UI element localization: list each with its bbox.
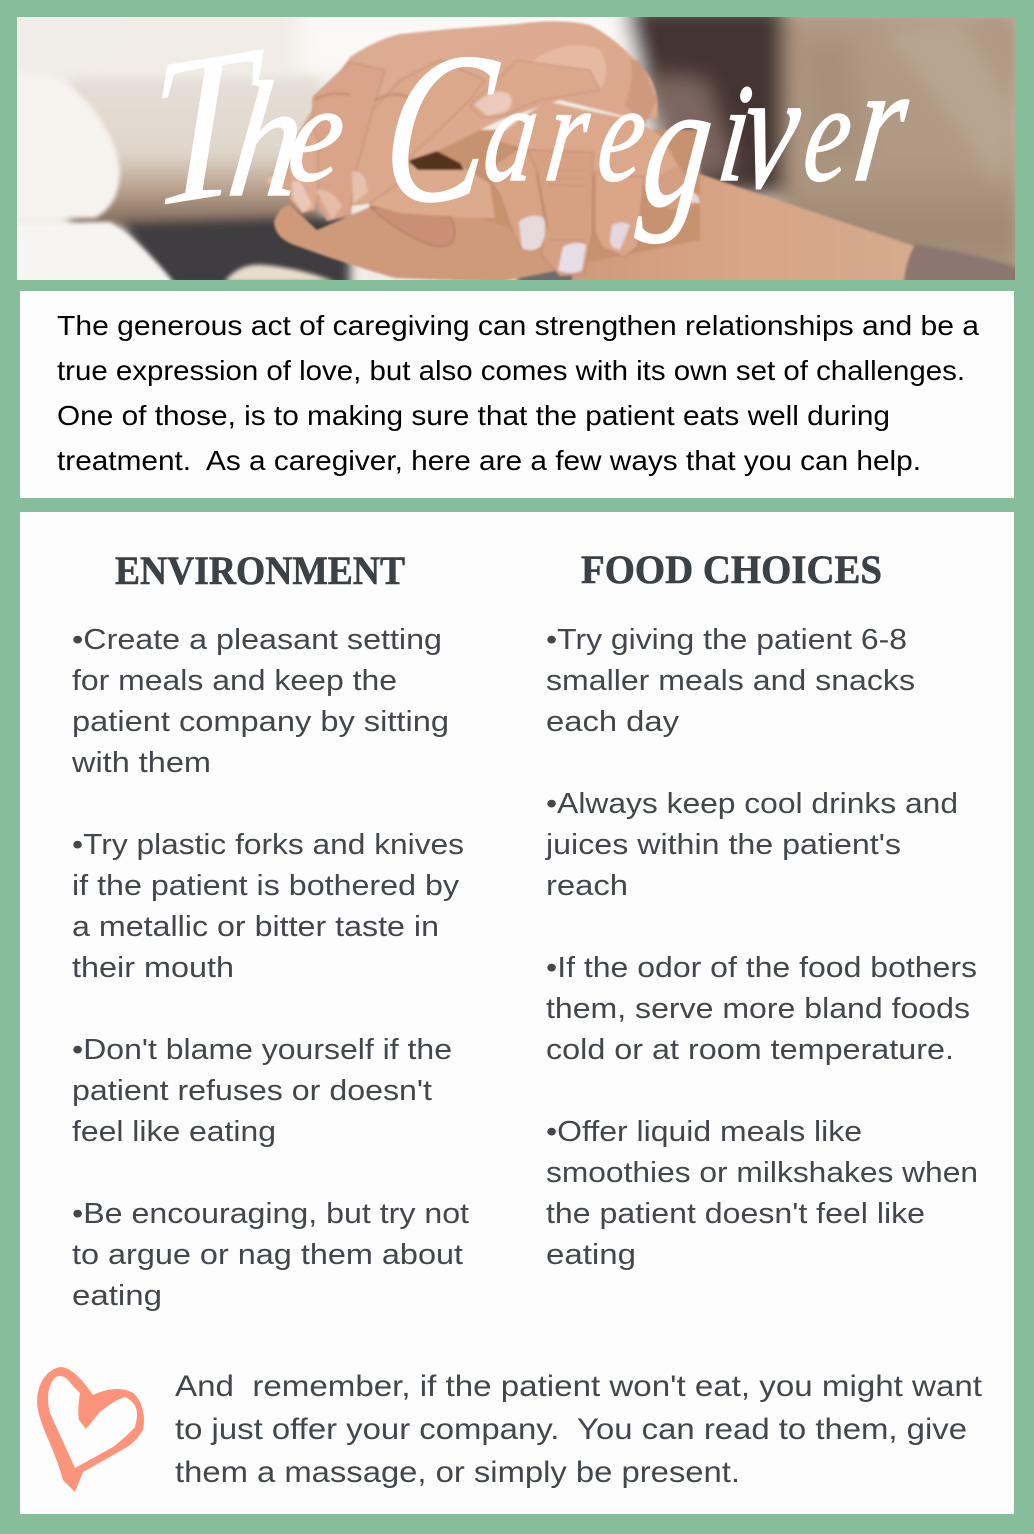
- old hand nails: [519, 216, 545, 250]
- lower inner finger: [370, 207, 455, 246]
- tip: pleasant setting: [71, 624, 449, 779]
- thumb nail: [474, 92, 512, 116]
- old hand finger D: [658, 167, 692, 208]
- column: environment: [71, 548, 469, 1312]
- tip: don't blame yourself: •Don't blame yourself if the: [72, 1034, 452, 1066]
- title: C: [372, 8, 508, 247]
- title: [120, 0, 922, 254]
- old hand wrinkles: [550, 170, 585, 240]
- tip: cool drinks: •Always keep cool drinks and: [546, 788, 958, 820]
- finger two: [310, 62, 385, 221]
- tip: food odor: cold or at room temperature.: [546, 1034, 954, 1066]
- title: e: [281, 57, 354, 211]
- old hand finger C: [595, 172, 644, 257]
- intro text: true expression of love, but also comes with its own set of challenges.: [57, 355, 965, 386]
- title: r: [846, 29, 919, 218]
- lower hand: [274, 205, 560, 282]
- column: food choices: [545, 547, 978, 1271]
- horizontal finger: [370, 163, 495, 218]
- title: a: [477, 56, 547, 211]
- closing message: [175, 1370, 983, 1489]
- hand shadow base: [368, 128, 702, 262]
- tip: food odor: •If the odor of the food bothers: [546, 952, 977, 984]
- header banner: [17, 17, 1015, 280]
- closing message: And remember, if the patient won't eat, you might want: [175, 1370, 983, 1403]
- heading: environment: ENVIRONMENT: [115, 548, 405, 593]
- tip: plastic forks: a metallic or bitter taste in: [72, 911, 439, 943]
- dark gap: [408, 150, 464, 172]
- heading: food choices: FOOD CHOICES: [581, 547, 882, 592]
- title: e: [590, 56, 655, 211]
- old hand finger A: [492, 150, 544, 240]
- tip: cool drinks: juices within the patient's: [545, 829, 901, 861]
- tip: plastic forks: their mouth: [72, 952, 234, 984]
- title: h: [220, 49, 314, 231]
- tip: be encouraging: [72, 1198, 469, 1312]
- old hand: [500, 102, 678, 187]
- tip: cool drinks: [545, 788, 958, 902]
- tip: smaller meals: each day: [546, 706, 680, 738]
- finger three: [288, 120, 317, 214]
- forearm: [570, 172, 914, 285]
- knuckle shadows: [315, 93, 410, 100]
- tip: be encouraging: eating: [72, 1280, 162, 1312]
- tip: food odor: [546, 952, 977, 1066]
- tip: don't blame yourself: patient refuses or doesn't: [72, 1075, 432, 1107]
- tip: plastic forks: if the patient is bothered by: [72, 870, 460, 902]
- tip: smaller meals: •Try giving the patient 6-8: [546, 624, 907, 656]
- tip: pleasant setting: with them: [71, 747, 211, 779]
- finger one: [352, 60, 485, 205]
- panel: tips: [20, 512, 1014, 1514]
- highlight on thumb base: [532, 45, 606, 88]
- tip: liquid meals: the patient doesn't feel like: [546, 1198, 925, 1230]
- tip: liquid meals: eating: [546, 1239, 636, 1271]
- tip: smaller meals: smaller meals and snacks: [546, 665, 915, 697]
- tip: liquid meals: [546, 1116, 978, 1271]
- intro text: One of those, is to making sure that the patient eats well during: [57, 400, 890, 431]
- tip: liquid meals: smoothies or milkshakes when: [546, 1157, 978, 1189]
- top hand nails: [352, 172, 368, 204]
- tip: don't blame yourself: feel like eating: [72, 1116, 276, 1148]
- finger four: [265, 170, 290, 190]
- title: g: [634, 45, 724, 245]
- tip: be encouraging: •Be encouraging, but try not: [72, 1198, 469, 1230]
- icon: brush heart: [37, 1367, 144, 1492]
- tip: pleasant setting: •Create a pleasant setting: [72, 624, 442, 656]
- top hand thumb: [470, 60, 600, 117]
- tip: pleasant setting: for meals and keep the: [72, 665, 397, 697]
- title: r: [539, 56, 599, 211]
- old hand finger B: [527, 150, 593, 276]
- tip: don't blame yourself: [72, 1034, 452, 1148]
- title: i: [711, 56, 760, 211]
- panel: intro: [20, 291, 1014, 498]
- tip: food odor: them, serve more bland foods: [546, 993, 970, 1025]
- tip: smaller meals: [546, 624, 915, 738]
- title: T: [120, 0, 293, 254]
- intro text: [57, 310, 979, 476]
- intro text: treatment. As a caregiver, here are a few ways that you can help.: [57, 445, 921, 476]
- photo: clasped hands: [10, 5, 1027, 290]
- closing message: to just offer your company. You can read to them, give: [175, 1413, 967, 1446]
- title: v: [732, 36, 811, 225]
- closing message: them a massage, or simply be present.: [175, 1456, 740, 1489]
- tip: be encouraging: to argue or nag them about: [72, 1239, 463, 1271]
- tip: plastic forks: •Try plastic forks and knives: [72, 829, 464, 861]
- tip: pleasant setting: patient company by sitting: [72, 706, 449, 738]
- tip: liquid meals: •Offer liquid meals like: [546, 1116, 862, 1148]
- tip: cool drinks: reach: [546, 870, 628, 902]
- back of top hand: [299, 20, 659, 163]
- intro text: The generous act of caregiving can strengthen relationships and be a: [57, 310, 979, 341]
- tip: plastic forks: [72, 829, 464, 984]
- title: e: [796, 56, 861, 211]
